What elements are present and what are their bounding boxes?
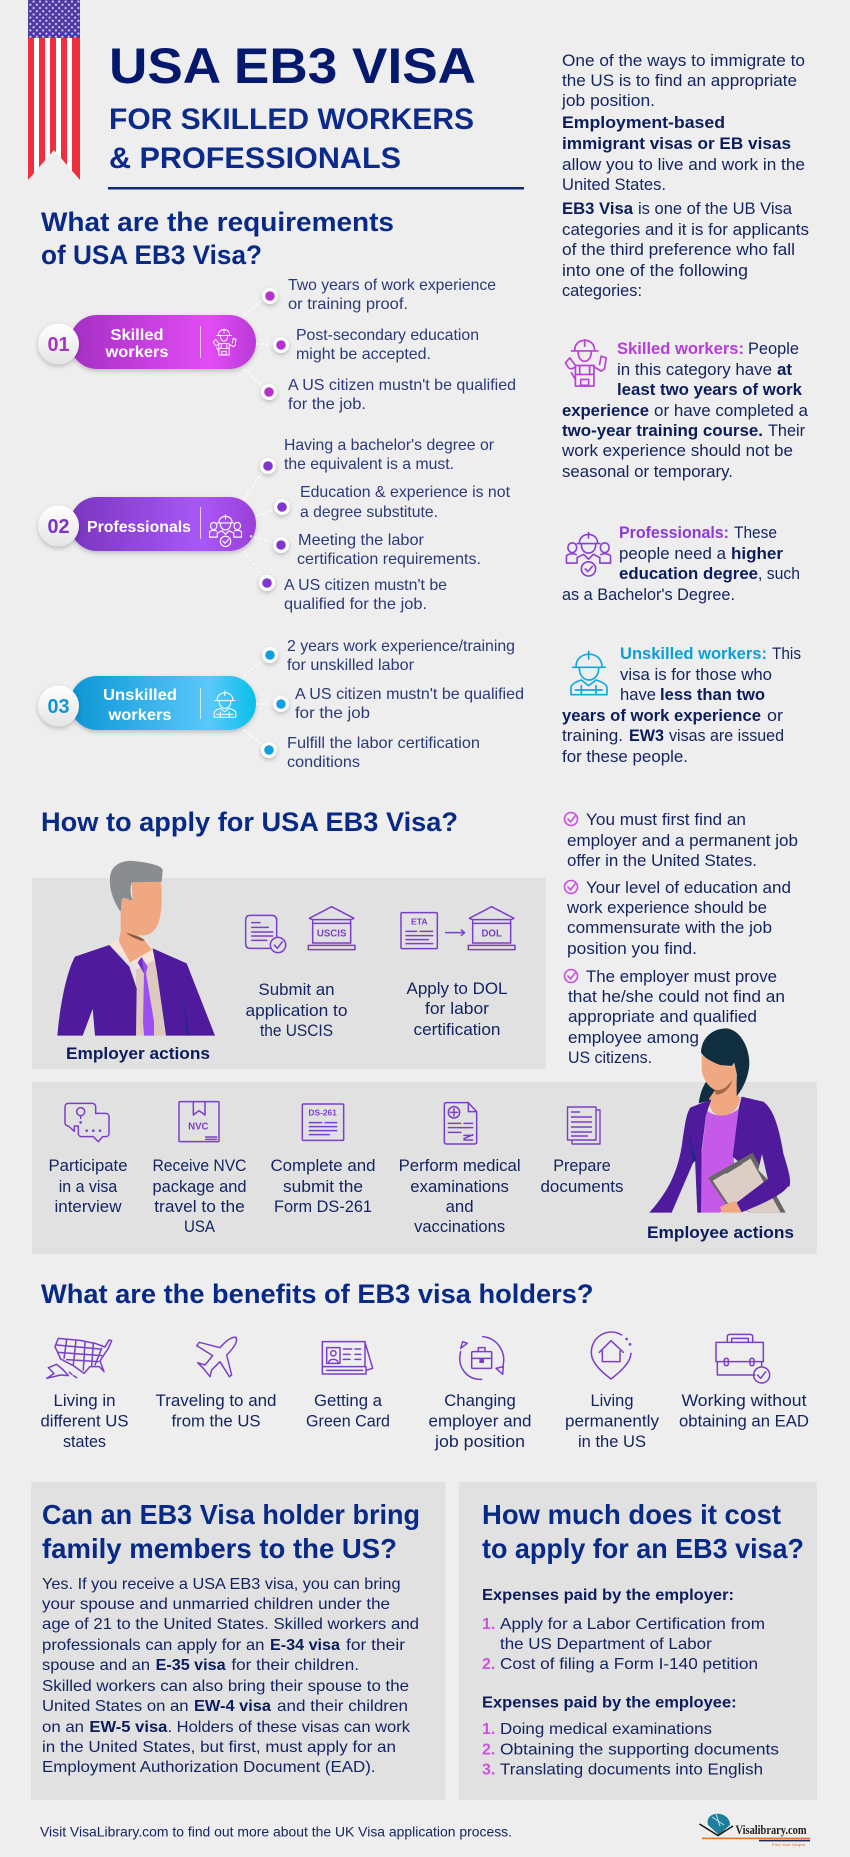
pill: 02 professionals xyxy=(38,497,256,551)
text: family members answer: your spouse and unmarried children under the xyxy=(42,1596,390,1613)
requirements list 01: might be accepted. xyxy=(296,346,431,363)
list: employer expenses: Expenses paid by the employer: xyxy=(482,1587,734,1604)
checklist: employee among xyxy=(568,1028,699,1047)
text: family members answer: age of 21 to the United States. Skilled workers and xyxy=(42,1616,419,1633)
icon: NVC package xyxy=(179,1102,219,1142)
text: family members answer: on an xyxy=(42,1719,84,1736)
text: apply to DOL: certification xyxy=(414,1020,500,1039)
checklist: employer and a permanent job xyxy=(567,831,798,850)
requirements list 03: conditions xyxy=(287,754,360,771)
icon: ETA to DOL xyxy=(401,907,515,950)
category: skilled workers: experience xyxy=(562,401,649,420)
logo: Visalibrary.com xyxy=(700,1814,810,1847)
text: employee action labels xyxy=(48,1156,624,1236)
intro text: One of the ways to immigrate to xyxy=(562,51,805,70)
panel: family members xyxy=(31,1482,446,1800)
icon: visa interview xyxy=(65,1103,109,1142)
icon: ETA to DOL: DOL xyxy=(481,928,502,939)
list: employer expenses: the US Department of Labor xyxy=(500,1636,712,1653)
text: employee action labels: Participate xyxy=(48,1156,128,1175)
text: employee action labels: submit the xyxy=(283,1177,363,1196)
icon: form DS-261 xyxy=(302,1104,344,1140)
illustration: employee xyxy=(649,1028,790,1213)
text: family members answer: for their xyxy=(346,1637,406,1654)
intro text: job position. xyxy=(561,91,655,110)
requirements list 02: certification requirements. xyxy=(297,551,481,568)
category: unskilled workers: visa is for those who xyxy=(620,665,772,684)
category: skilled workers: seasonal or temporary. xyxy=(562,462,733,481)
text: employee action labels: package and xyxy=(152,1177,246,1196)
category: professionals xyxy=(562,523,800,604)
text: employee action labels: travel to the xyxy=(154,1197,245,1216)
panel: cost xyxy=(459,1482,817,1800)
requirements list 02: A US citizen mustn't be xyxy=(284,577,447,594)
text: benefit labels: different US xyxy=(40,1412,128,1430)
text: benefit labels: Living in xyxy=(54,1392,116,1410)
icon: USCIS application: USCIS xyxy=(317,928,347,939)
intro text: into one of the following xyxy=(562,261,748,280)
list: employee expenses: Translating documents into English xyxy=(500,1762,763,1779)
requirements list 03: A US citizen mustn't be qualified xyxy=(295,686,524,703)
requirements list 01: Two years of work experience xyxy=(288,277,496,294)
pill: 02 professionals: Professionals xyxy=(87,519,191,536)
list: employer expenses: Cost of filing a Form I-140 petition xyxy=(500,1656,758,1673)
requirements list 02: a degree substitute. xyxy=(300,504,438,521)
requirements list 03: 2 years work experience/training xyxy=(287,638,515,655)
requirements list 01: or training proof. xyxy=(288,296,408,313)
text: benefit labels: employer and xyxy=(428,1412,532,1430)
category: skilled workers: two-year training course. xyxy=(562,421,763,440)
requirements list 01 xyxy=(244,277,516,413)
illustration: employer xyxy=(57,861,215,1036)
intro text: immigrant visas or EB visas xyxy=(562,134,791,153)
pill: 03 unskilled workers xyxy=(38,676,256,730)
category: unskilled workers: or xyxy=(767,706,783,725)
category: skilled workers: at xyxy=(777,360,792,379)
category: unskilled workers: less than two xyxy=(660,685,765,704)
intro text: of the third preference who fall xyxy=(562,240,795,259)
text: family members answer: . Holders of these visas can work xyxy=(168,1719,411,1736)
list: employee expenses: 3. xyxy=(482,1762,495,1779)
category: professionals: education degree xyxy=(619,564,758,583)
checklist: The employer must prove xyxy=(586,967,777,986)
category: unskilled workers: years of work experience xyxy=(562,706,761,725)
category: unskilled workers: training. xyxy=(562,726,623,745)
checklist: work experience should be xyxy=(566,898,767,917)
icon: house pin xyxy=(591,1332,631,1379)
list: employer expenses xyxy=(482,1587,765,1673)
icon: green card xyxy=(322,1342,373,1374)
icon: USCIS application xyxy=(246,907,355,953)
icon: documents xyxy=(568,1107,600,1144)
title xyxy=(108,38,524,190)
requirements list 01: A US citizen mustn't be qualified xyxy=(288,377,516,394)
heading: cost: How much does it cost xyxy=(482,1499,781,1530)
footer text: Visit VisaLibrary.com to find out more about the UK Visa application process. xyxy=(40,1824,512,1840)
category: professionals: Professionals: xyxy=(619,523,729,542)
text: employee action labels: interview xyxy=(54,1197,122,1216)
text: family members answer xyxy=(42,1576,419,1776)
intro text: is one of the UB Visa xyxy=(638,199,793,218)
pill: 01 skilled workers: 01 xyxy=(48,334,70,356)
checklist: commensurate with the job xyxy=(567,918,772,937)
intro text: EB3 Visa xyxy=(562,199,634,218)
heading: cost xyxy=(482,1499,804,1564)
category: professionals: These xyxy=(734,523,777,542)
category: skilled workers: Skilled workers: xyxy=(617,339,744,358)
text: family members answer: professionals can apply for an xyxy=(42,1637,264,1654)
text: benefit labels: states xyxy=(63,1433,106,1451)
category: unskilled workers: visas are issued xyxy=(669,726,784,745)
intro text: the US is to find an appropriate xyxy=(562,71,797,90)
text: submit an application: Submit an xyxy=(258,980,334,999)
checklist: US citizens. xyxy=(568,1048,652,1067)
category: unskilled workers: for these people. xyxy=(562,747,688,766)
requirements list 02: the equivalent is a must. xyxy=(284,456,454,473)
text: benefit labels: Changing xyxy=(444,1392,516,1410)
logo: Visalibrary.com: Find Your Utopia xyxy=(772,1842,806,1847)
pill: 03 unskilled workers: workers xyxy=(107,707,172,724)
requirements list 02: Education & experience is not xyxy=(300,484,511,501)
text: submit an application: application to xyxy=(246,1001,348,1020)
intro text: categories and it is for applicants xyxy=(562,220,809,239)
text: employee action labels: examinations xyxy=(410,1177,509,1196)
heading: family members xyxy=(42,1499,420,1564)
requirements list 03: Fulfill the labor certification xyxy=(287,735,480,752)
pill: 01 skilled workers: Skilled xyxy=(110,327,164,344)
category: skilled workers: least two years of work xyxy=(617,380,803,399)
category: unskilled workers: have xyxy=(620,685,656,704)
text: family members answer: Skilled workers can also bring their spouse to the xyxy=(42,1678,409,1695)
checklist: Your level of education and xyxy=(586,878,791,897)
heading: benefits: What are the benefits of EB3 visa holders? xyxy=(41,1279,594,1309)
text: benefit labels: Traveling to and xyxy=(156,1392,276,1410)
list: employer expenses: Apply for a Labor Certification from xyxy=(500,1616,765,1633)
requirements list 03: for unskilled labor xyxy=(287,657,415,674)
text: family members answer: EW-4 visa xyxy=(194,1698,271,1715)
text: benefit labels: job position xyxy=(434,1433,525,1451)
text: employee action labels: Complete and xyxy=(270,1156,376,1175)
title: & PROFESSIONALS xyxy=(109,142,401,175)
icon: US map xyxy=(47,1338,112,1378)
text: submit an application: the USCIS xyxy=(260,1021,333,1040)
category: skilled workers: Their xyxy=(768,421,805,440)
title: FOR SKILLED WORKERS xyxy=(109,103,474,136)
icon: medical report xyxy=(444,1103,477,1144)
text: benefit labels: from the US xyxy=(172,1412,260,1430)
list: employee expenses xyxy=(482,1695,779,1779)
text: apply to DOL: Apply to DOL xyxy=(406,979,508,998)
text: family members answer: E-35 visa xyxy=(156,1657,226,1674)
checklist: appropriate and qualified xyxy=(568,1007,757,1026)
text: benefit labels: Getting a xyxy=(314,1392,383,1410)
heading: cost: to apply for an EB3 visa? xyxy=(482,1533,804,1564)
requirements list 03: for the job xyxy=(295,705,370,722)
text: family members answer: Employment Authorization Document (EAD). xyxy=(42,1759,376,1776)
list: employee expenses: Expenses paid by the employee: xyxy=(482,1695,737,1712)
icon: form DS-261: DS-261 xyxy=(309,1108,337,1118)
category: professionals: , such xyxy=(758,564,800,583)
logo: Visalibrary.com: Visalibrary.com xyxy=(736,1822,807,1837)
text: employee action labels: Prepare xyxy=(553,1156,611,1175)
text: benefit labels: in the US xyxy=(578,1433,646,1451)
text: employee action labels: in a visa xyxy=(59,1177,118,1196)
requirements list 02: Meeting the labor xyxy=(298,532,425,549)
list: employee expenses: Obtaining the supporting documents xyxy=(500,1742,779,1758)
title: USA EB3 VISA xyxy=(109,38,476,94)
pill: 02 professionals: 02 xyxy=(48,516,70,538)
requirements list 02: Having a bachelor's degree or xyxy=(284,437,495,454)
intro text: categories: xyxy=(562,281,642,300)
icon: briefcase check xyxy=(716,1334,770,1383)
category: skilled workers xyxy=(561,339,809,481)
panel: employee actions xyxy=(32,1082,817,1254)
category: professionals: higher xyxy=(731,544,783,563)
intro text xyxy=(561,51,809,300)
requirements list 02 xyxy=(244,437,511,613)
list: employee expenses: 1. xyxy=(482,1721,495,1738)
panel: employer actions xyxy=(32,878,546,1069)
category: skilled workers: in this category have xyxy=(617,360,772,379)
checklist: position you find. xyxy=(567,939,697,958)
heading: how to apply: How to apply for USA EB3 Visa? xyxy=(41,807,458,837)
text: family members answer: spouse and an xyxy=(42,1657,150,1674)
text: family members answer: EW-5 visa xyxy=(89,1719,168,1736)
text: benefit labels: Green Card xyxy=(306,1412,390,1430)
icon: ETA to DOL: ETA xyxy=(411,917,428,927)
text: submit an application xyxy=(246,980,348,1040)
text: benefit labels: obtaining an EAD xyxy=(679,1412,809,1430)
label: employer actions: Employer actions xyxy=(66,1044,210,1063)
heading: requirements xyxy=(41,207,394,270)
ribbon: US flag xyxy=(28,0,80,180)
intro text: allow you to live and work in the xyxy=(562,155,805,174)
text: employee action labels: vaccinations xyxy=(414,1217,505,1236)
list: employer expenses: 2. xyxy=(482,1656,495,1673)
text: apply to DOL: for labor xyxy=(425,999,489,1018)
pill: 03 unskilled workers: 03 xyxy=(48,696,70,718)
requirements list 02: qualified for the job. xyxy=(284,596,427,613)
category: unskilled workers: EW3 xyxy=(629,726,664,745)
heading: family members: Can an EB3 Visa holder bring xyxy=(42,1499,420,1530)
text: family members answer: for their children. xyxy=(231,1657,359,1674)
category: skilled workers: or have completed a xyxy=(654,401,809,420)
intro text: United States. xyxy=(562,175,666,194)
text: benefit labels: Living xyxy=(590,1392,634,1410)
checklist xyxy=(564,810,798,1067)
heading: requirements: What are the requirements xyxy=(41,207,394,237)
category: professionals: people need a xyxy=(619,544,727,563)
category: unskilled workers: Unskilled workers: xyxy=(620,644,767,663)
checklist: that he/she could not find an xyxy=(568,987,785,1006)
text: family members answer: United States on an xyxy=(42,1698,189,1715)
text: apply to DOL xyxy=(406,979,508,1039)
checklist: You must first find an xyxy=(586,810,746,829)
requirements list 03 xyxy=(244,638,524,771)
text: family members answer: in the United States, but first, must apply for an xyxy=(42,1739,396,1756)
heading: family members: family members to the US? xyxy=(42,1533,397,1564)
pill: 01 skilled workers: workers xyxy=(104,344,169,361)
requirements list 01: Post-secondary education xyxy=(296,327,479,344)
text: family members answer: Yes. If you receive a USA EB3 visa, you can bring xyxy=(42,1576,400,1593)
icon: NVC package: NVC xyxy=(188,1121,209,1132)
icon: change job xyxy=(460,1337,504,1379)
category: skilled workers: People xyxy=(748,339,799,358)
list: employee expenses: 2. xyxy=(482,1742,495,1758)
pill: 01 skilled workers xyxy=(38,315,256,369)
text: employee action labels: Form DS-261 xyxy=(274,1197,372,1216)
category: unskilled workers: This xyxy=(772,644,801,663)
category: professionals: as a Bachelor's Degree. xyxy=(562,585,735,604)
text: family members answer: E-34 visa xyxy=(270,1637,340,1654)
pill: 03 unskilled workers: Unskilled xyxy=(103,687,177,704)
icon: plane xyxy=(197,1337,237,1377)
intro text: Employment-based xyxy=(562,113,725,132)
text: employee action labels: and xyxy=(446,1197,474,1216)
category: unskilled workers xyxy=(562,644,801,766)
text: employee action labels: Receive NVC xyxy=(152,1156,246,1175)
text: benefit labels: Working without xyxy=(682,1392,807,1410)
text: employee action labels: USA xyxy=(184,1217,216,1236)
checklist: offer in the United States. xyxy=(567,851,757,870)
list: employer expenses: 1. xyxy=(482,1616,495,1633)
text: employee action labels: Perform medical xyxy=(399,1156,521,1175)
list: employee expenses: Doing medical examinations xyxy=(500,1721,712,1738)
label: employee actions: Employee actions xyxy=(647,1223,794,1242)
text: benefit labels: permanently xyxy=(565,1412,660,1430)
category: skilled workers: work experience should not be xyxy=(561,441,793,460)
text: employee action labels: documents xyxy=(540,1177,624,1196)
requirements list 01: for the job. xyxy=(288,396,366,413)
text: family members answer: and their children xyxy=(277,1698,408,1715)
text: benefit labels xyxy=(40,1392,809,1451)
heading: requirements: of USA EB3 Visa? xyxy=(41,240,262,270)
